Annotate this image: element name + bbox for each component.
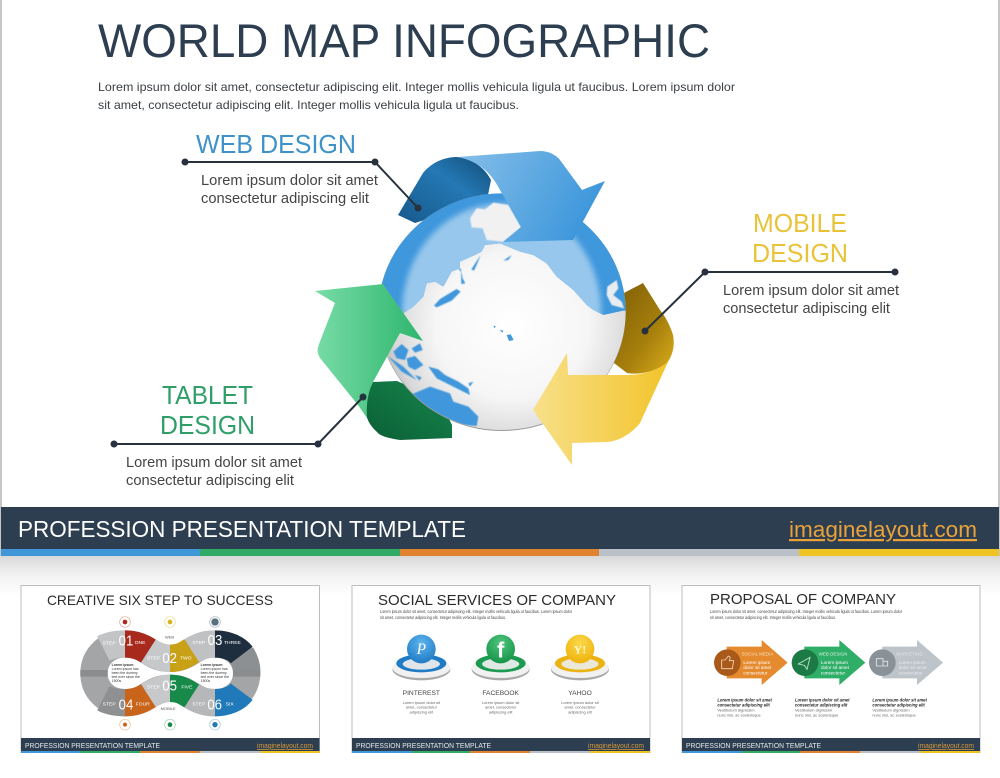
thumbnail title: SOCIAL SERVICES OF COMPANY <box>378 593 616 609</box>
thumbnail intro text: Lorem ipsum dolor sit amet, consectetur adipiscing elit. Integer mollis vehicula ligula ut faucibus. Lorem ipsum dolor <box>380 609 572 614</box>
infinity diagram: STEP <box>103 640 116 646</box>
infinity diagram <box>94 617 247 730</box>
thumbnail footer: imaginelayout.com <box>918 741 974 750</box>
arrow: social media: consectetur <box>743 670 768 675</box>
button: facebook: FACEBOOK <box>482 690 520 697</box>
thumbnail footer: PROFESSION PRESENTATION TEMPLATE <box>25 741 160 750</box>
button: yahoo: Y! <box>574 643 586 657</box>
infinity diagram: text ever since the <box>112 675 140 679</box>
thumbnail intro text: sit amet, consectetur adipiscing elit. Integer mollis vehicula ligula ut faucibus. <box>380 615 506 620</box>
heading: mobile design <box>752 208 848 268</box>
arrow: social media: dolor sit amet <box>743 665 772 670</box>
infinity diagram: STEP <box>147 655 161 661</box>
infinity diagram: FIVE <box>181 684 193 690</box>
arrow: marketing: nunc nisi, ac scelerisque <box>872 712 917 717</box>
arrow: social media: Vestibulum dignissim <box>717 707 755 712</box>
arrow: web design: consectetur adipiscing elit <box>795 702 848 707</box>
infinity diagram: TWO <box>180 655 192 661</box>
button: yahoo: adipiscing elit <box>568 709 593 714</box>
infinity diagram: STEP <box>147 684 161 690</box>
infinity diagram: 06 <box>207 697 222 713</box>
arrow: web design: WEB DESIGN <box>819 651 847 656</box>
arrow: dark blue fold <box>398 157 491 223</box>
infinity diagram: 1500s <box>201 679 210 683</box>
arrow: marketing: consectetur adipiscing elit <box>872 702 925 707</box>
thumbnail title: CREATIVE SIX STEP TO SUCCESS <box>47 592 273 608</box>
text: tablet design: Lorem ipsum dolor sit amet <box>126 455 302 471</box>
arrow: marketing: MARKETING <box>896 651 924 656</box>
button: pinterest: P <box>416 641 426 658</box>
heading: mobile design: DESIGN <box>752 238 848 268</box>
button: facebook: Lorem ipsum dolor sit <box>482 700 520 705</box>
arrow: social media: consectetur adipiscing elit <box>717 702 770 707</box>
footer title: PROFESSION PRESENTATION TEMPLATE <box>18 516 466 542</box>
infinity diagram: Lorem ipsum <box>112 663 134 667</box>
heading: tablet design: DESIGN <box>160 410 255 440</box>
connector: web design <box>182 158 422 212</box>
arrow: web design: Vestibulum dignissim <box>795 707 833 712</box>
infinity diagram: THREE <box>224 640 242 646</box>
thumbnail intro text <box>380 609 572 620</box>
intro text <box>98 80 735 112</box>
globe with recycling arrows <box>315 140 674 465</box>
button: yahoo <box>551 635 609 714</box>
arrow: dark green fold <box>366 381 452 440</box>
infinity diagram: 1500s <box>112 679 121 683</box>
thumbnail footer: PROFESSION PRESENTATION TEMPLATE <box>686 741 821 750</box>
land: north america fragments <box>607 280 624 308</box>
arrow: dark yellow fold <box>610 283 674 374</box>
infinity diagram: SIX <box>226 702 234 708</box>
infinity diagram: STEP <box>192 702 206 708</box>
thumbnail: proposal <box>682 586 980 753</box>
button: facebook: amet, consectetur <box>485 704 517 709</box>
infinity diagram: 02 <box>162 651 177 667</box>
arrow: marketing: consectetur <box>899 670 923 675</box>
connector: mobile design <box>642 268 898 334</box>
infinity diagram: Lorem ipsum <box>201 663 223 667</box>
infinity diagram: text ever since the <box>201 675 229 679</box>
arrow: web design: Lorem ipsum dolor sit amet <box>795 697 850 702</box>
button: pinterest: adipiscing elit <box>410 709 434 714</box>
thumbnail intro text: Lorem ipsum dolor sit amet, consectetur adipiscing elit. Integer mollis vehicula ligula ut faucibus. Lorem ipsum dolor <box>710 609 902 614</box>
arrow: social media: nunc nisi, ac scelerisque <box>717 712 762 717</box>
heading: tablet design: TABLET <box>162 380 253 410</box>
arrow: web design: Lorem ipsum <box>821 660 848 665</box>
thumbnail footer <box>682 738 980 753</box>
land: japan and nearby seas <box>434 255 512 307</box>
arrow: marketing: dolor sit amet <box>899 665 927 670</box>
arrow: web design: dolor sit amet <box>821 665 850 670</box>
thumbnail footer <box>21 738 320 753</box>
arrow: social media: Lorem ipsum <box>743 660 770 665</box>
infinity diagram: 01 <box>119 634 133 650</box>
ocean highlight <box>399 200 604 315</box>
arrow: social media: Lorem ipsum dolor sit amet <box>717 697 772 702</box>
infinity diagram: been the dummy <box>201 671 227 675</box>
footer bar <box>1 507 999 556</box>
text: tablet design <box>126 455 302 489</box>
arrow: web design <box>792 640 865 717</box>
button: yahoo: amet, consectetur <box>564 704 596 709</box>
button: pinterest: amet, consectetur <box>406 704 438 709</box>
button: yahoo: YAHOO <box>568 690 592 697</box>
arrow: web design: consectetur <box>821 670 846 675</box>
intro text: Lorem ipsum dolor sit amet, consectetur adipiscing elit. Integer mollis vehicula ligula ut faucibus. Lorem ipsum dolor <box>98 80 735 94</box>
button: pinterest: Lorem ipsum dolor sit <box>403 700 441 705</box>
button: pinterest: PINTEREST <box>403 690 440 697</box>
land: arctic patch <box>470 203 521 242</box>
arrow: marketing: Lorem ipsum dolor sit amet <box>872 697 927 702</box>
infinity diagram: MOBILE <box>161 706 176 711</box>
arrow: social media: SOCIAL MEDIA <box>742 651 773 656</box>
heading: mobile design: MOBILE <box>753 208 847 238</box>
thumbnail intro text: sit amet, consectetur adipiscing elit. Integer mollis vehicula ligula ut faucibus. <box>710 615 836 620</box>
thumbnail footer: imaginelayout.com <box>257 741 313 750</box>
button: facebook <box>472 635 530 714</box>
land: hawaii <box>493 325 514 341</box>
infinity diagram: 05 <box>162 678 177 694</box>
land: australia <box>410 387 478 426</box>
title: WORLD MAP INFOGRAPHIC <box>98 14 710 67</box>
text: mobile design: Lorem ipsum dolor sit amet <box>723 283 899 299</box>
heading: tablet design <box>160 380 255 440</box>
infinity diagram: ONE <box>135 640 146 646</box>
thumbnail: social services <box>352 586 650 753</box>
text: web design <box>201 173 378 207</box>
button: facebook: adipiscing elit <box>489 709 513 714</box>
arrow: marketing: Lorem ipsum <box>899 660 926 665</box>
connector: tablet design <box>110 394 366 448</box>
infinity diagram: WEB <box>165 634 174 639</box>
arrow: light blue <box>457 151 605 242</box>
infinity diagram: 03 <box>208 633 222 649</box>
infinity diagram: STEP <box>103 702 116 708</box>
arrow: marketing: Vestibulum dignissim <box>872 707 910 712</box>
thumbnail: six step <box>21 586 320 753</box>
button: facebook: f <box>497 637 505 662</box>
thumbnail footer: imaginelayout.com <box>588 741 644 750</box>
arrow: light green <box>315 284 423 418</box>
arrow: yellow <box>533 353 668 465</box>
text: web design: Lorem ipsum dolor sit amet <box>201 173 378 189</box>
thumbnail footer <box>352 738 650 753</box>
heading: web design: WEB DESIGN <box>196 129 356 159</box>
infinity diagram: 04 <box>119 697 133 713</box>
infinity diagram: FOUR <box>136 702 150 708</box>
text: mobile design: consectetur adipiscing elit <box>723 301 890 317</box>
arrow: marketing <box>869 640 943 717</box>
infinity diagram: STEP <box>192 640 206 646</box>
arrow: web design: nunc nisi, ac scelerisque <box>795 712 839 717</box>
land: indonesia and pacific islands <box>388 343 473 395</box>
button: yahoo: Lorem ipsum dolor sit <box>561 700 600 705</box>
button: pinterest <box>392 635 450 714</box>
footer link: imaginelayout.com <box>789 517 977 542</box>
infinity diagram: Lorem Ipsum has <box>112 667 139 671</box>
ocean cap <box>382 193 626 315</box>
text: web design: consectetur adipiscing elit <box>201 191 369 207</box>
callout: web design <box>182 129 422 212</box>
text: mobile design <box>723 283 899 317</box>
thumbnail footer: PROFESSION PRESENTATION TEMPLATE <box>356 741 491 750</box>
intro text: sit amet, consectetur adipiscing elit. Integer mollis vehicula ligula ut faucibus. <box>98 98 519 112</box>
thumbnail title: PROPOSAL OF COMPANY <box>710 592 896 608</box>
infinity diagram: been the dummy <box>112 671 138 675</box>
arrow: social media <box>714 640 788 717</box>
globe <box>382 193 626 431</box>
callout: mobile design <box>642 208 899 334</box>
thumbnail intro text <box>710 609 902 620</box>
callout: tablet design <box>110 380 366 489</box>
infinity diagram: Lorem Ipsum has <box>201 667 228 671</box>
text: tablet design: consectetur adipiscing elit <box>126 473 294 489</box>
